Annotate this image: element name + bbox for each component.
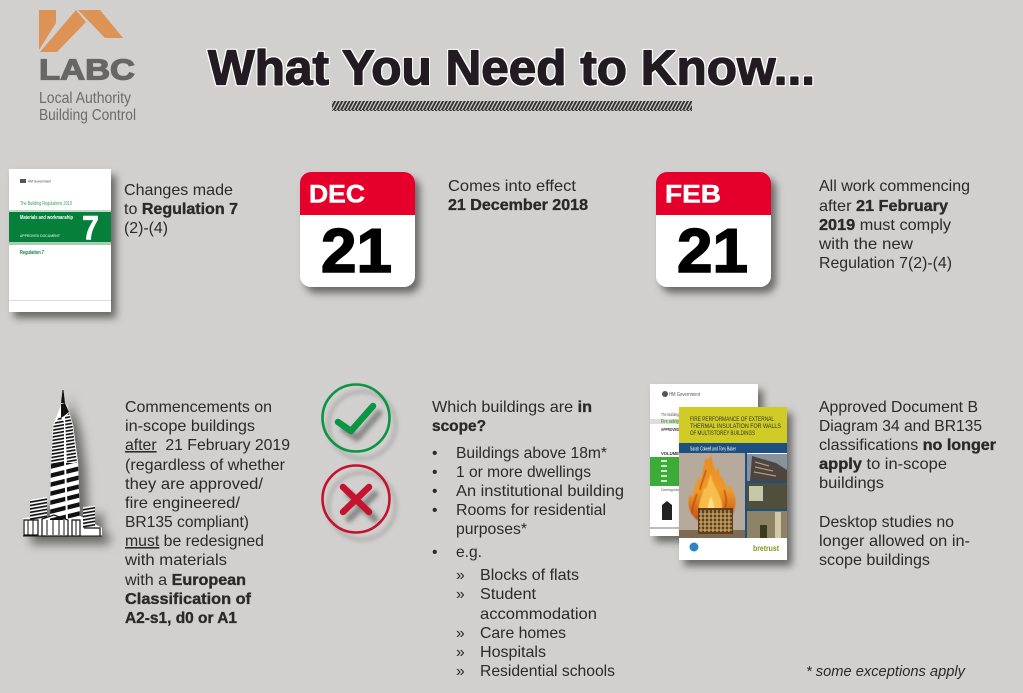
title: What You Need to Know...: [208, 42, 815, 96]
text: all work commencing: after 21 February: [819, 198, 948, 215]
text: commencements on in-scope buildings: they are approved/: [125, 476, 264, 493]
logo: LABC Local Authority Building Control: [39, 10, 136, 124]
text: approved document B no longer applies: apply to in-scope: [819, 456, 947, 473]
text: changes to regulation 7: Changes made: [124, 182, 233, 199]
text: all work commencing: Regulation 7(2)-(4): [819, 255, 952, 272]
text: commencements on in-scope buildings: in-scope buildings: [125, 418, 255, 435]
text: which buildings are in scope: purposes*: [456, 521, 527, 538]
icon: Approved Document 7 cover: HM Government: [28, 178, 52, 184]
title underline hatch: [332, 101, 692, 111]
text: all work commencing: 2019 must comply: [819, 217, 951, 234]
text: commencements on in-scope buildings: [124, 399, 290, 627]
logo: LABC Local Authority Building Control: Building Control: [39, 107, 136, 124]
text: which buildings are in scope: »: [456, 663, 465, 680]
icon: Approved Document 7 cover: Materials and workmanship: [20, 215, 73, 221]
footnote: * some exceptions apply: [806, 664, 966, 680]
text: which buildings are in scope: Hospitals: [480, 644, 546, 661]
icon: Approved Document 7 cover: [9, 169, 111, 312]
text: which buildings are in scope: »: [456, 625, 465, 642]
text: comes into effect: 21 December 2018: [448, 197, 588, 214]
text: which buildings are in scope: 1 or more dwellings: [456, 464, 591, 481]
text: commencements on in-scope buildings: with materials: [124, 552, 227, 569]
logo: LABC Local Authority Building Control: Local Authority: [39, 90, 131, 107]
text: which buildings are in scope: Residential schools: [480, 663, 615, 680]
icon: red cross in circle: [322, 466, 396, 540]
icon: BR135 fire performance cover: FIRE PERFORMANCE OF EXTERNAL: [690, 416, 774, 423]
text: approved document B no longer applies: Approved Document B: [819, 399, 978, 416]
icon: Approved Document B cover: HM Government: [669, 392, 701, 398]
text: approved document B no longer applies: Diagram 34 and BR135: [819, 418, 982, 435]
icon: calendar February 21: FEB: [665, 180, 721, 208]
text: which buildings are in scope: •: [432, 445, 438, 462]
text: approved document B no longer applies: buildings: [819, 475, 884, 492]
text: all work commencing: [818, 178, 970, 272]
text: changes to regulation 7: to Regulation 7: [124, 201, 238, 218]
icon: BR135 fire performance cover: Sarah Colwell and Tony Baker: [690, 446, 736, 452]
icon: calendar February 21: [656, 172, 771, 287]
text: which buildings are in scope: scope?: [432, 418, 486, 435]
text: desktop studies: Desktop studies no: [819, 514, 954, 531]
text: desktop studies: scope buildings: [819, 552, 930, 569]
icon: Approved Document B cover: Coming into: [661, 487, 680, 492]
text: which buildings are in scope: »: [456, 567, 465, 584]
text: desktop studies: longer allowed on in-: [819, 533, 970, 550]
text: approved document B no longer applies: [819, 399, 996, 492]
icon: Approved Document B cover: The Building: [661, 412, 679, 417]
text: commencements on in-scope buildings: Commencements on: [125, 399, 272, 416]
text: which buildings are in scope: •: [432, 464, 438, 481]
text: which buildings are in scope: [432, 399, 624, 680]
text: which buildings are in scope: •: [432, 502, 438, 519]
text: commencements on in-scope buildings: (regardless of whether: [125, 457, 285, 474]
icon: Approved Document 7 cover: Regulation 7: [20, 250, 44, 256]
text: commencements on in-scope buildings: Classification of: [125, 591, 252, 608]
text: commencements on in-scope buildings: fire engineered/: [125, 495, 241, 512]
logo: LABC Local Authority Building Control: LABC: [39, 54, 135, 86]
icon: BR135 fire performance cover: bretrust: [753, 544, 779, 553]
text: which buildings are in scope: e.g.: [456, 544, 482, 561]
text: commencements on in-scope buildings: must be redesigned: [125, 533, 264, 550]
text: which buildings are in scope: Which buildings are in: [432, 399, 592, 416]
text: all work commencing: with the new: [818, 236, 914, 253]
icon: Approved Document B cover: [650, 384, 758, 536]
text: approved document B no longer applies: classifications no longer: [819, 437, 996, 454]
icon: green check in circle: [322, 384, 396, 458]
text: which buildings are in scope: Blocks of flats: [480, 567, 579, 584]
text: desktop studies: [819, 514, 970, 569]
text: commencements on in-scope buildings: after 21 February 2019: [125, 437, 290, 454]
icon: BR135 fire performance cover: OF MULTISTOREY BUILDINGS: [690, 430, 755, 437]
text: all work commencing: All work commencing: [819, 178, 970, 195]
text: commencements on in-scope buildings: A2-s1, d0 or A1: [125, 610, 237, 627]
text: which buildings are in scope: Rooms for residential: [456, 502, 606, 519]
icon: BR135 fire performance cover: [679, 407, 787, 560]
icon: BR135 fire performance cover: THERMAL INSULATION FOR WALLS: [690, 423, 782, 430]
icon: tower building: [23, 390, 102, 536]
icon: Approved Document B cover: APPROVED: [661, 427, 680, 432]
icon: calendar December 21: DEC: [309, 180, 365, 208]
text: changes to regulation 7: (2)-(4): [124, 220, 168, 237]
icon: Approved Document 7 cover: 7: [82, 210, 99, 248]
icon: calendar February 21: 21: [677, 217, 748, 286]
text: which buildings are in scope: •: [432, 483, 438, 500]
icon: Approved Document 7 cover: APPROVED DOCUMENT: [20, 233, 60, 238]
icon: calendar December 21: 21: [321, 217, 392, 286]
icon: Approved Document B cover: Fire safety: [661, 419, 679, 425]
text: changes to regulation 7: [124, 182, 238, 237]
text: comes into effect: [448, 178, 588, 214]
text: which buildings are in scope: An institutional building: [456, 483, 624, 500]
icon: Approved Document 7 cover: The Building Regulations 2010: [20, 201, 72, 207]
text: comes into effect: Comes into effect: [448, 178, 577, 195]
text: commencements on in-scope buildings: BR135 compliant): [125, 514, 249, 531]
text: which buildings are in scope: Student: [480, 586, 537, 603]
icon: calendar December 21: [300, 172, 415, 287]
text: which buildings are in scope: »: [456, 644, 465, 661]
text: which buildings are in scope: Care homes: [480, 625, 566, 642]
text: which buildings are in scope: accommodation: [480, 606, 597, 623]
text: which buildings are in scope: Buildings above 18m*: [456, 445, 607, 462]
text: which buildings are in scope: »: [456, 586, 465, 603]
icon: Approved Document B cover: VOLUME: [661, 451, 679, 456]
text: which buildings are in scope: •: [432, 544, 438, 561]
text: commencements on in-scope buildings: with a European: [124, 572, 246, 589]
